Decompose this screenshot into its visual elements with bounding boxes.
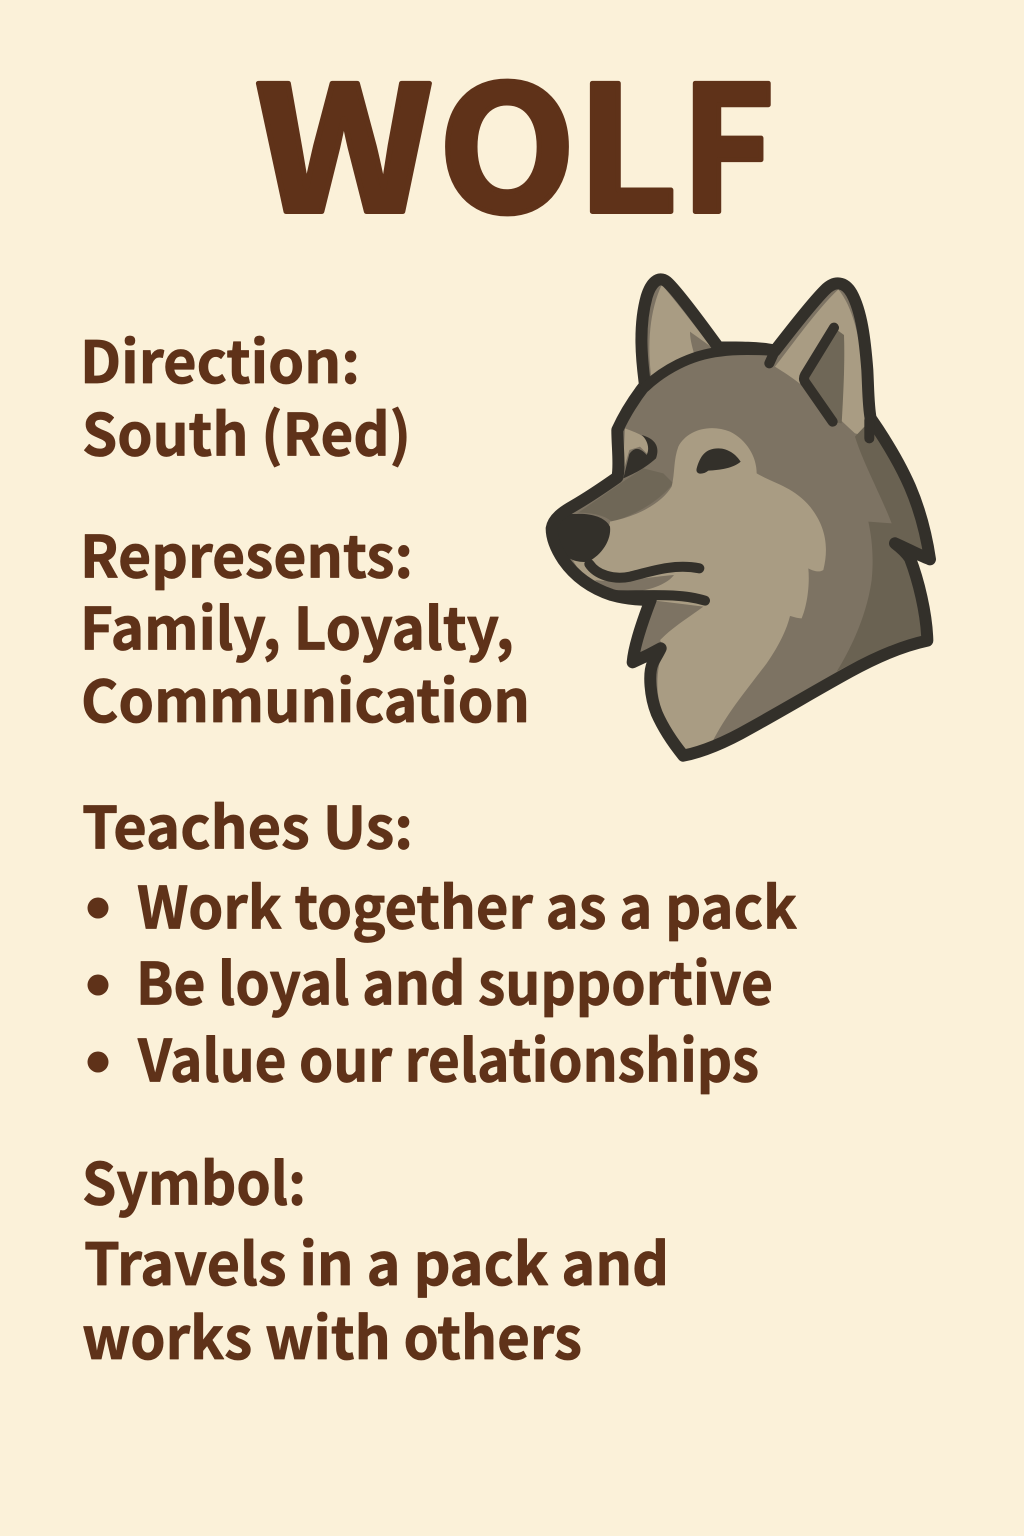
right ear light <box>775 289 868 437</box>
nose <box>549 514 610 562</box>
text block: symbol: Symbol: <box>82 1138 306 1222</box>
mouth line <box>589 564 699 578</box>
text block: symbol: works with others <box>82 1292 582 1376</box>
text block: teaches us: Teaches Us: <box>82 782 413 866</box>
text block: direction <box>80 316 411 472</box>
text block: represents: Represents: <box>80 510 413 594</box>
near eye <box>696 448 741 474</box>
forehead outline <box>645 350 775 387</box>
text block: represents: Family, Loyalty, <box>80 582 514 666</box>
bullet list: Value our relationships <box>137 1014 759 1098</box>
title: W <box>255 10 433 262</box>
title: L <box>576 10 678 262</box>
icon: wolf head <box>549 279 930 756</box>
bullet list: Be loyal and supportive <box>136 938 773 1022</box>
right ear inner shade <box>805 328 844 423</box>
face and chest light fur <box>570 428 826 750</box>
text block: teaches us <box>82 782 797 1098</box>
snout top shade <box>578 468 673 522</box>
right ear inner outline <box>804 328 869 438</box>
text block: symbol <box>82 1138 669 1376</box>
text block: symbol: Travels in a pack and <box>84 1218 669 1302</box>
lower jaw line <box>613 595 705 601</box>
bullet list <box>88 862 797 1098</box>
far eye light patch <box>623 428 650 473</box>
under jaw shade <box>638 601 702 657</box>
text block: direction: Direction: <box>80 316 360 400</box>
left ear inner <box>649 285 713 380</box>
title <box>255 10 774 262</box>
text block: represents: Communication <box>81 655 530 739</box>
lip shade <box>595 575 674 593</box>
text block: represents <box>80 510 530 739</box>
bullet list: Work together as a pack <box>137 862 797 946</box>
head outline <box>552 279 930 756</box>
neck dark shade <box>837 420 929 672</box>
left ear shade <box>690 332 713 353</box>
far eye <box>623 435 657 478</box>
title: F <box>680 10 774 262</box>
wolf base silhouette <box>552 279 930 756</box>
title: O <box>438 10 576 262</box>
text block: direction: South (Red) <box>82 388 411 472</box>
